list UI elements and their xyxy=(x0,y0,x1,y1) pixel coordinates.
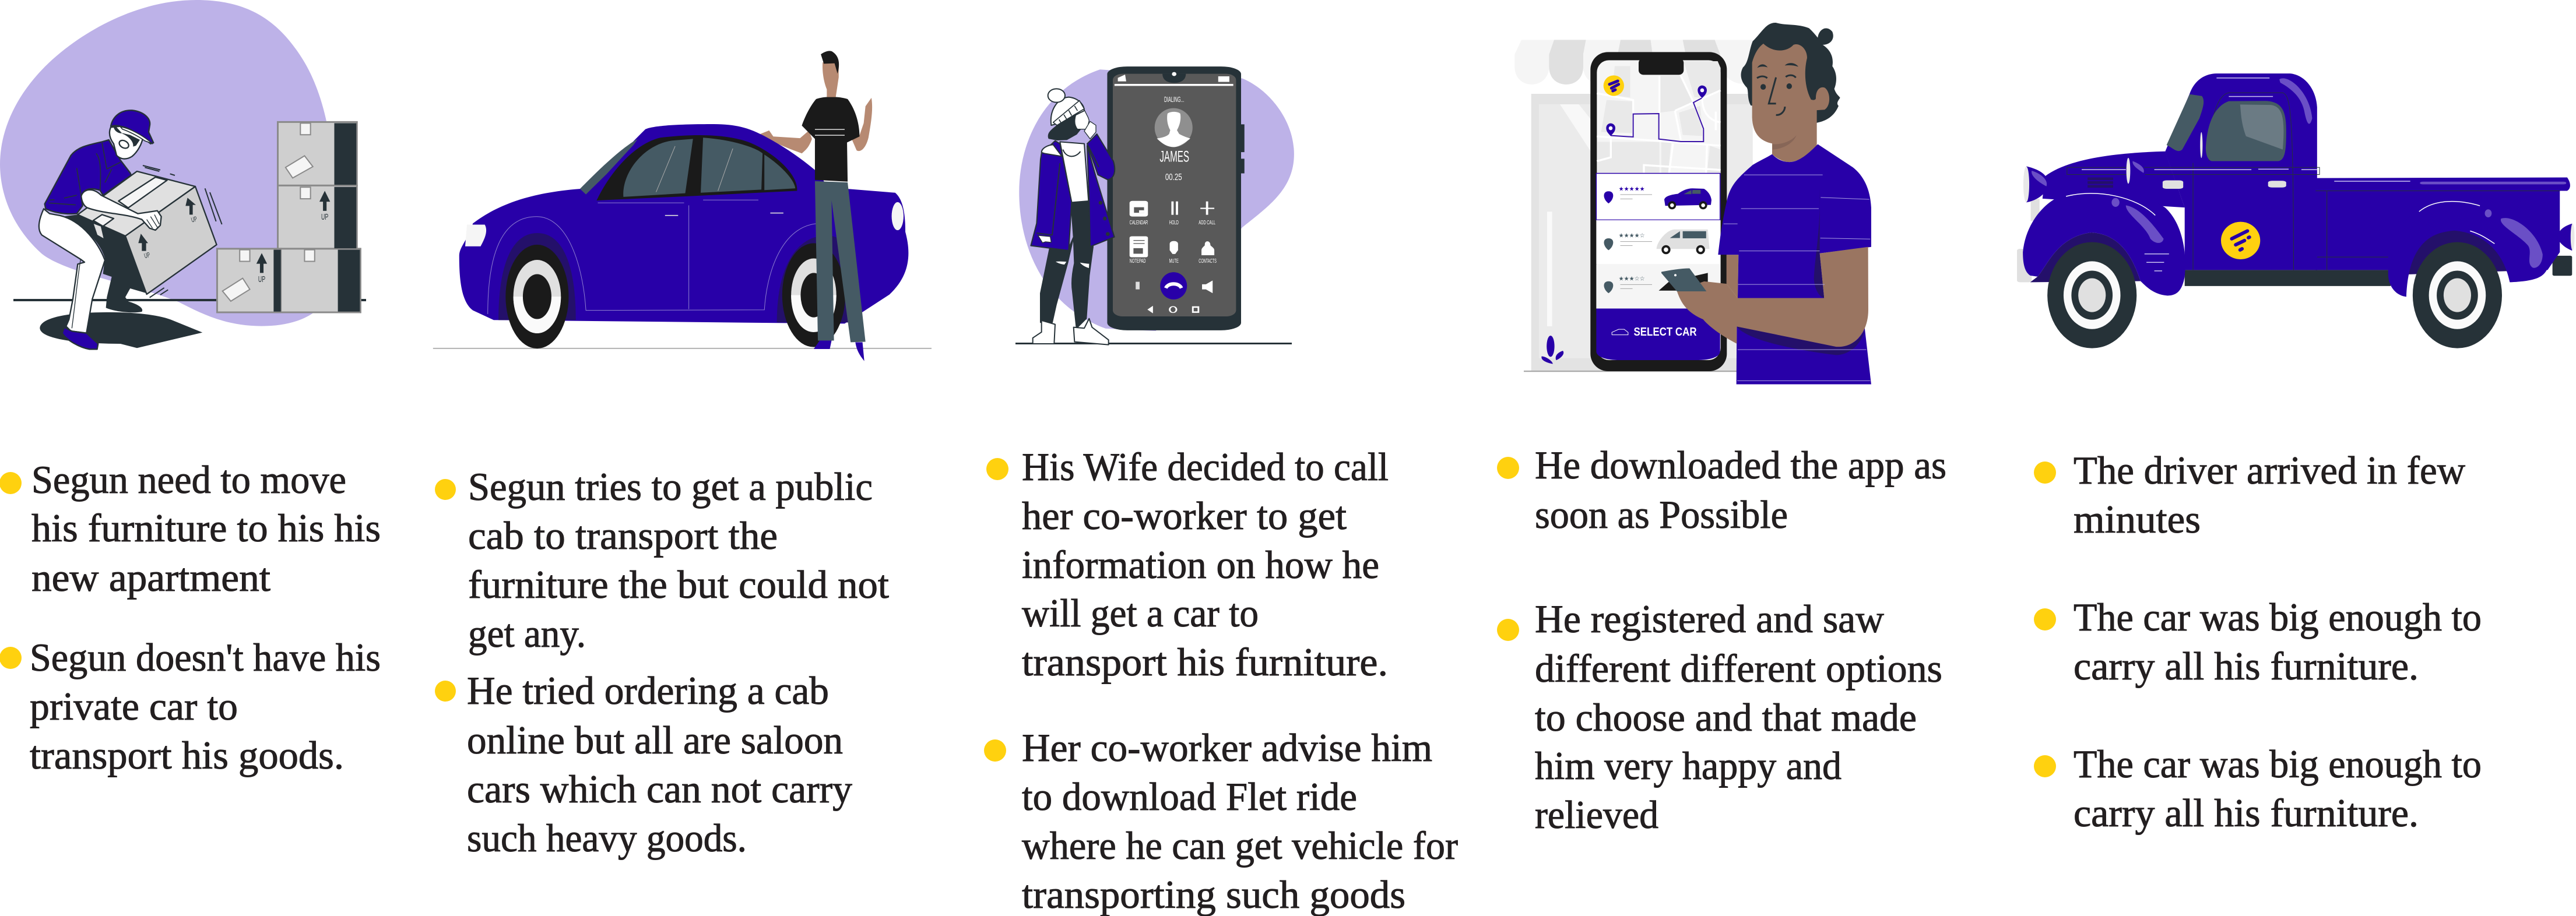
man holding phone xyxy=(1661,23,1871,385)
text column 2: online but all are saloon xyxy=(467,718,843,762)
text column 4 xyxy=(1497,443,1946,837)
mover figure xyxy=(39,110,222,349)
ride cards: ★★★★☆ xyxy=(1619,232,1645,239)
text column 4: soon as Possible xyxy=(1535,492,1788,537)
text column 1: transport his goods. xyxy=(30,733,344,777)
text column 1: private car to xyxy=(30,684,238,728)
bumpers xyxy=(2017,199,2572,282)
illustration: man selecting a car in the app xyxy=(1514,23,1871,385)
giant phone: DIALING... xyxy=(1164,95,1184,104)
car body xyxy=(459,124,908,323)
giant phone: JAMES xyxy=(1159,147,1189,165)
illustration: mover lifting boxes xyxy=(0,0,366,349)
text column 2: He tried ordering a cab xyxy=(467,668,829,713)
giant phone xyxy=(1107,66,1245,330)
text column 1: Segun doesn't have his xyxy=(30,635,381,679)
bullet xyxy=(0,472,22,494)
stacked boxes xyxy=(217,122,360,312)
text column 5: The car was big enough to xyxy=(2074,595,2482,639)
giant phone: CONTACTS xyxy=(1199,258,1217,264)
text column 2: cars which can not carry xyxy=(467,767,852,811)
chassis xyxy=(2185,270,2391,286)
stacked boxes: UP xyxy=(321,212,328,221)
giant phone: MUTE xyxy=(1169,258,1179,264)
illustration: man beside blue car xyxy=(433,51,932,361)
text column 3: to download Flet ride xyxy=(1022,774,1357,819)
app phone xyxy=(1590,52,1727,371)
text column 1: new apartment xyxy=(31,555,270,600)
giant phone: HOLD xyxy=(1169,219,1179,226)
map xyxy=(1597,61,1721,173)
logo badge xyxy=(2221,222,2260,259)
text column 4: him very happy and xyxy=(1535,744,1841,788)
giant phone: ADD CALL xyxy=(1199,219,1215,226)
lilac blob xyxy=(1019,69,1294,331)
lamps xyxy=(2023,132,2574,251)
illustration: blue pickup truck xyxy=(2017,73,2574,348)
ride cards: ★★★★★ xyxy=(1619,185,1645,192)
storefront background xyxy=(1514,40,1753,372)
floor shadow xyxy=(40,312,202,348)
text column 2: such heavy goods. xyxy=(467,816,747,860)
text column 5: minutes xyxy=(2074,497,2201,541)
giant phone: 00.25 xyxy=(1165,172,1182,182)
select car button xyxy=(1596,309,1720,360)
truck bed xyxy=(2315,177,2570,270)
text column 4: He downloaded the app as xyxy=(1535,443,1946,487)
text column 3: will get a car to xyxy=(1022,591,1259,635)
giant phone: NOTEPAD xyxy=(1130,258,1145,264)
illustration: woman on a phone call xyxy=(1015,66,1294,345)
car lights xyxy=(465,202,904,246)
text column 4: to choose and that made xyxy=(1535,695,1917,739)
text column 5: carry all his furniture. xyxy=(2074,791,2419,835)
text column 3: His Wife decided to call xyxy=(1022,445,1389,489)
text column 3: transporting such goods xyxy=(1022,872,1405,916)
text column 5 xyxy=(2034,448,2482,835)
lilac blob xyxy=(0,0,333,326)
text column 1: his furniture to his his xyxy=(31,506,381,550)
text column 4: He registered and saw xyxy=(1535,597,1884,641)
text column 5: The driver arrived in few xyxy=(2074,448,2465,492)
stacked boxes: UP xyxy=(258,274,265,284)
cab xyxy=(2043,73,2566,270)
text column 3: Her co-worker advise him xyxy=(1022,725,1432,770)
small blue car xyxy=(1664,188,1712,209)
ride cards xyxy=(1596,174,1720,309)
text column 2: get any. xyxy=(468,611,586,656)
man's raised arms xyxy=(760,131,812,153)
text column 2 xyxy=(435,464,889,860)
text column 3: where he can get vehicle for xyxy=(1022,823,1458,868)
text column 1: Segun need to move xyxy=(31,457,346,502)
text column 3: information on how he xyxy=(1022,542,1379,587)
text column 2: cab to transport the xyxy=(468,513,778,558)
text column 1 xyxy=(0,457,381,777)
woman figure xyxy=(1031,89,1115,345)
bullet xyxy=(986,458,1008,480)
rear fender xyxy=(2388,196,2549,297)
front fender xyxy=(2023,191,2185,295)
bullet xyxy=(1497,457,1519,479)
mover figure: UP xyxy=(190,214,198,224)
bullet xyxy=(2034,461,2056,484)
text column 3: her co-worker to get xyxy=(1022,494,1347,538)
text column 2: Segun tries to get a public xyxy=(468,464,873,509)
bullet xyxy=(435,479,456,500)
text column 4: different different options xyxy=(1535,646,1942,690)
icon: plant xyxy=(1541,336,1563,364)
car wheels xyxy=(505,243,845,348)
giant phone: CALENDAR xyxy=(1130,219,1148,226)
man figure xyxy=(802,51,872,361)
select car button: SELECT CAR xyxy=(1633,325,1697,339)
logo badge xyxy=(1604,75,1624,96)
text column 3 xyxy=(984,445,1458,916)
text column 3: transport his furniture. xyxy=(1022,640,1388,684)
wheels xyxy=(2030,231,2507,348)
text column 5: carry all his furniture. xyxy=(2074,644,2419,688)
ride cards: ★★★☆☆ xyxy=(1619,275,1645,282)
text column 2: furniture the but could not xyxy=(468,562,889,607)
text column 5: The car was big enough to xyxy=(2074,742,2482,786)
text column 4: relieved xyxy=(1535,792,1658,837)
mover figure: UP xyxy=(143,251,151,260)
